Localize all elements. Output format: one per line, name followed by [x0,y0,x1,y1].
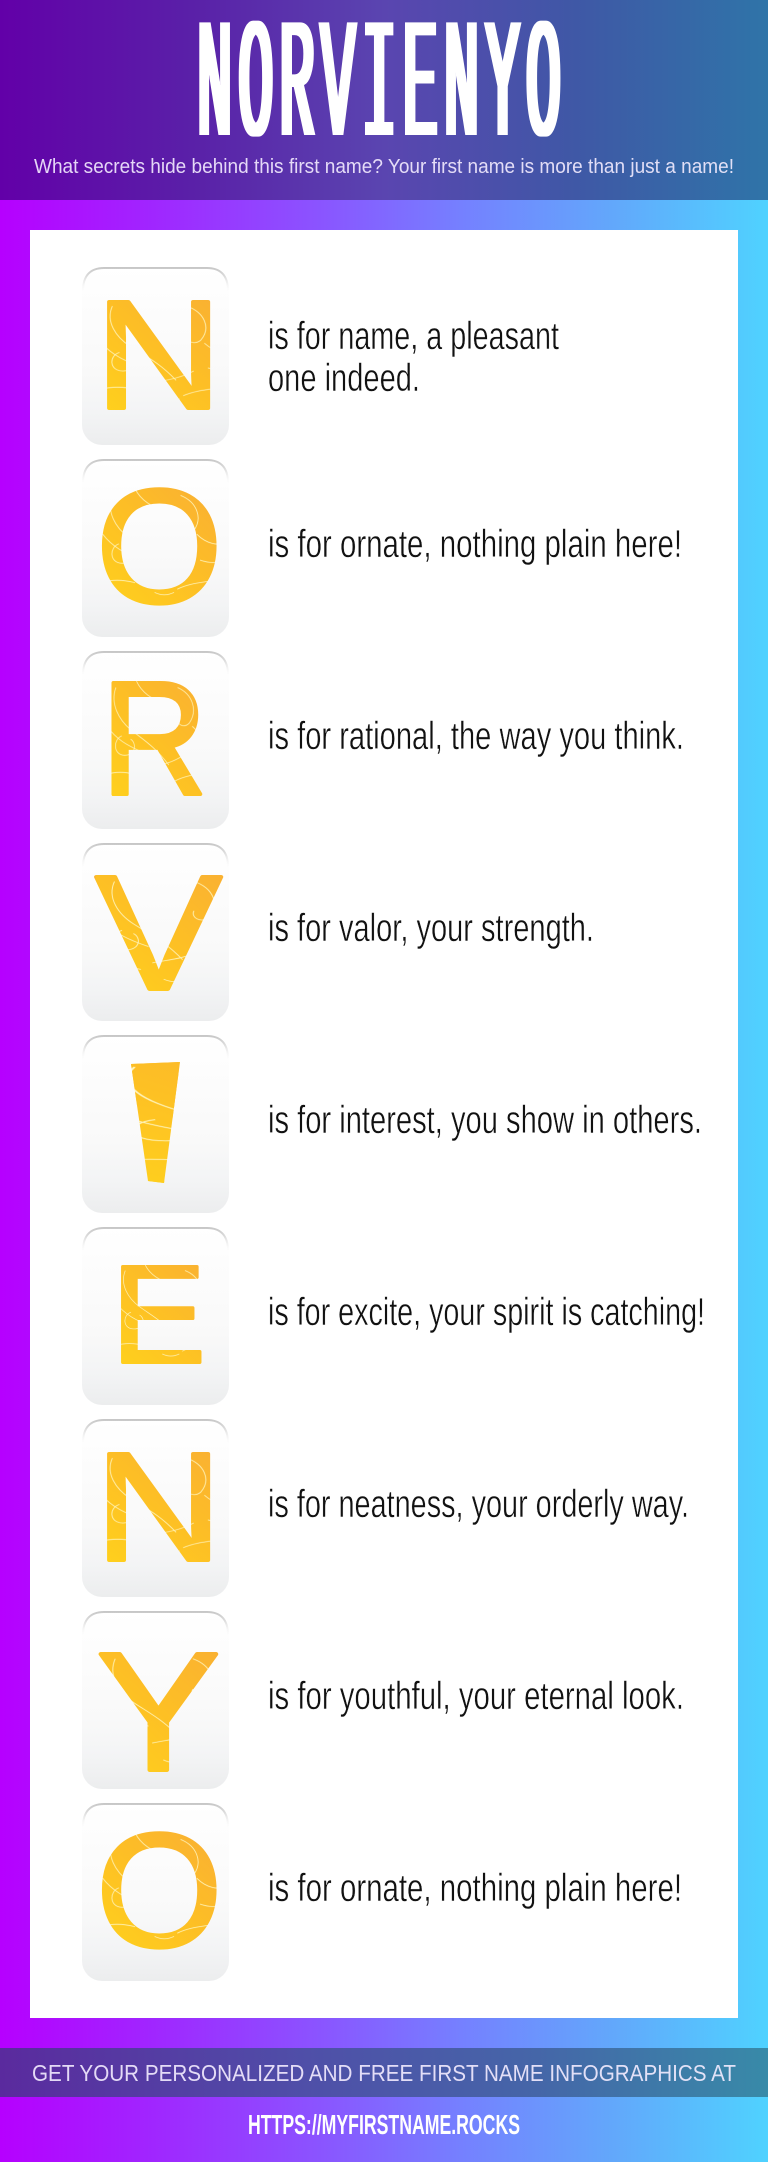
row: R [82,648,684,829]
row: E [82,1227,705,1405]
row: I [82,1024,702,1220]
icon: letter Y tile: Y [97,1619,220,1806]
subtitle: What secrets hide behind this first name? Your first name is more than just a name! [34,155,734,178]
icon: letter O tile: O [96,456,222,637]
row: Y [82,1611,684,1806]
icon: letter V tile: V [96,842,222,1024]
row: O second [82,1800,682,1981]
footer band [0,2048,768,2097]
row: O [82,456,682,637]
icon: letter O tile: O [96,1800,222,1981]
title: NORVIENYO [197,0,561,187]
text: V line: is for valor, your strength. [268,907,594,950]
icon: letter E tile: E [111,1237,206,1392]
icon: letter I tile: I [83,1024,226,1220]
header band [0,0,768,200]
text: N line: one indeed. [268,357,420,400]
icon: letter N tile: N [95,269,222,442]
icon: letter N tile: N [95,1421,222,1594]
icon: letter E tile [82,1227,229,1405]
row: V [82,842,594,1024]
row: N [82,267,559,445]
row: N second [82,1419,689,1597]
icon: letter R tile: R [101,648,207,829]
footer url: HTTPS://MYFIRSTNAME.ROCKS [248,2109,520,2140]
text: N line: is for name, a pleasant [268,315,559,358]
panel: letters card [30,230,738,2018]
